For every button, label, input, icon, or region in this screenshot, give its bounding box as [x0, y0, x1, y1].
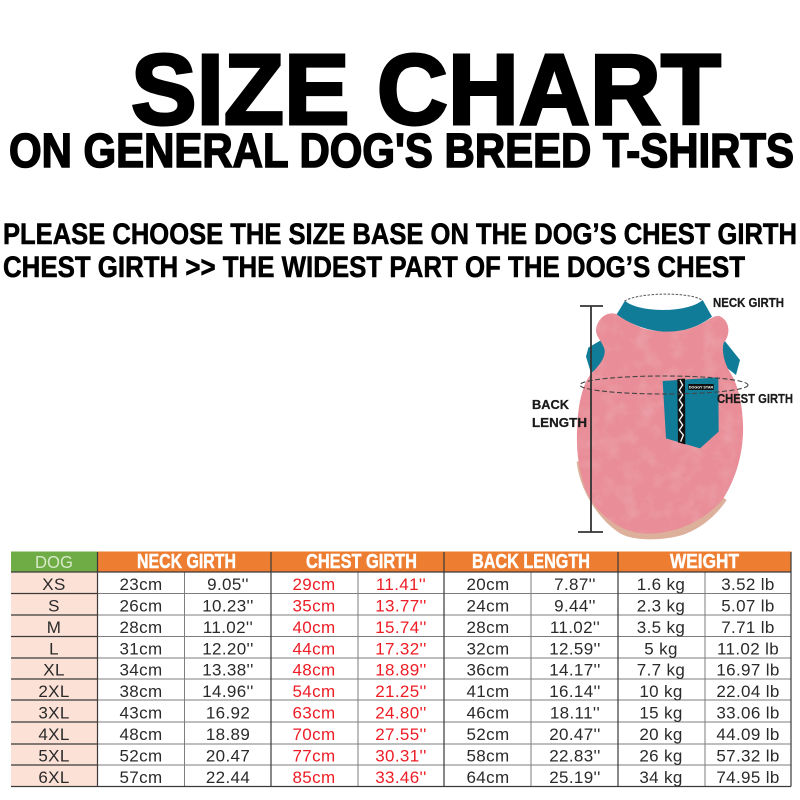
size column background — [11, 572, 98, 786]
label: back length — [532, 397, 587, 430]
back length arrow — [578, 306, 603, 532]
row 2XL: 38cm — [120, 682, 162, 701]
row S: 24cm — [467, 596, 509, 616]
row S: 35cm — [293, 596, 335, 616]
row 6XL — [38, 768, 780, 787]
row L — [49, 640, 779, 658]
label: neck girth: NECK GIRTH — [713, 295, 784, 310]
row XS: 23cm — [120, 575, 162, 594]
row XL: 48cm — [293, 660, 335, 680]
row XL: 18.89'' — [375, 660, 427, 680]
row 3XL: 3XL — [38, 704, 70, 722]
row 5XL: 57.32 lb — [716, 746, 780, 766]
row 4XL: 44.09 lb — [716, 725, 780, 744]
row L: 44cm — [293, 640, 335, 658]
row 5XL: 20.47 — [206, 746, 250, 766]
row XS: 11.41'' — [376, 575, 426, 594]
row 6XL: 33.46'' — [375, 768, 427, 787]
icon: dog fleece vest: DOGGY STAR — [689, 385, 713, 389]
row 5XL: 58cm — [467, 746, 509, 766]
row XS: 7.87'' — [554, 575, 596, 594]
row 5XL: 22.83'' — [549, 746, 601, 766]
row 5XL: 26 kg — [639, 746, 683, 766]
row M: 11.02'' — [550, 618, 600, 637]
row 2XL: 2XL — [38, 682, 70, 701]
row 3XL: 18.11'' — [550, 704, 600, 722]
row L: L — [49, 640, 59, 658]
row XS: 3.52 lb — [721, 575, 775, 594]
row XL: XL — [43, 660, 65, 680]
size table — [11, 551, 792, 787]
diagram: dog shirt with measurements — [532, 294, 793, 539]
row S: 10.23'' — [202, 596, 254, 616]
row 4XL: 18.89 — [206, 725, 250, 744]
row 2XL: 22.04 lb — [716, 682, 780, 701]
row 4XL: 20.47'' — [549, 725, 601, 744]
row 4XL: 27.55'' — [375, 725, 427, 744]
table header — [11, 551, 792, 573]
row S: 2.3 kg — [637, 596, 685, 616]
row M — [47, 618, 775, 637]
row XL: 7.7 kg — [637, 660, 685, 680]
row 4XL: 48cm — [120, 725, 162, 744]
icon: dog fleece vest — [577, 300, 743, 539]
row 5XL: 5XL — [38, 746, 70, 766]
row S: 9.44'' — [554, 596, 596, 616]
row 5XL — [38, 746, 780, 766]
row M: 40cm — [293, 618, 335, 637]
row 5XL: 30.31'' — [375, 746, 427, 766]
table header: NECK GIRTH — [137, 551, 236, 573]
row 2XL: 41cm — [467, 682, 509, 701]
row 3XL: 15 kg — [639, 704, 683, 722]
row M: 11.02'' — [203, 618, 253, 637]
row 6XL: 22.44 — [206, 768, 250, 787]
row 3XL: 46cm — [467, 704, 509, 722]
row 2XL: 10 kg — [639, 682, 683, 701]
row M: M — [47, 618, 61, 637]
row 6XL: 25.19'' — [549, 768, 601, 787]
row L: 32cm — [467, 640, 509, 658]
row 2XL: 21.25'' — [375, 682, 427, 701]
table header: DOG — [35, 552, 73, 572]
row XS: XS — [42, 575, 66, 594]
row 5XL: 52cm — [120, 746, 162, 766]
row 3XL: 33.06 lb — [716, 704, 780, 722]
title: SIZE CHART — [131, 34, 721, 146]
table header: WEIGHT — [670, 551, 739, 573]
row XL — [43, 660, 780, 680]
row S: S — [48, 596, 60, 616]
row XL: 13.38'' — [202, 660, 254, 680]
row XL: 14.17'' — [549, 660, 601, 680]
row 2XL: 16.14'' — [549, 682, 601, 701]
row 6XL: 85cm — [293, 768, 335, 787]
row 3XL: 63cm — [293, 704, 335, 722]
row M: 28cm — [467, 618, 509, 637]
row M: 15.74'' — [375, 618, 427, 637]
row XS: 9.05'' — [207, 575, 249, 594]
row XS: 1.6 kg — [637, 575, 685, 594]
row 2XL — [38, 682, 780, 701]
row L: 12.20'' — [202, 640, 254, 658]
row 3XL: 43cm — [120, 704, 162, 722]
row 6XL: 57cm — [120, 768, 162, 787]
row L: 5 kg — [644, 640, 678, 658]
row S: 26cm — [120, 596, 162, 616]
row 4XL: 4XL — [38, 725, 70, 744]
row 4XL: 52cm — [467, 725, 509, 744]
row 4XL: 20 kg — [639, 725, 683, 744]
row 3XL — [38, 704, 780, 722]
row 6XL: 74.95 lb — [716, 768, 780, 787]
row 6XL: 64cm — [467, 768, 509, 787]
chest girth dashed ellipse — [580, 376, 748, 394]
neck girth dashed ellipse — [624, 294, 702, 301]
row 3XL: 24.80'' — [375, 704, 427, 722]
row M: 3.5 kg — [637, 618, 685, 637]
row 2XL: 54cm — [293, 682, 335, 701]
label: back length: BACK — [532, 397, 570, 412]
row S: 13.77'' — [375, 596, 427, 616]
row XL: 16.97 lb — [716, 660, 780, 680]
row 5XL: 77cm — [293, 746, 335, 766]
row XL: 34cm — [120, 660, 162, 680]
row L: 31cm — [120, 640, 162, 658]
row S — [48, 596, 775, 616]
row L: 17.32'' — [375, 640, 427, 658]
row 4XL: 70cm — [293, 725, 335, 744]
table header: BACK LENGTH — [472, 551, 590, 573]
row XS: 29cm — [293, 575, 335, 594]
table header: CHEST GIRTH — [306, 551, 417, 573]
row XL: 36cm — [467, 660, 509, 680]
row 6XL: 6XL — [38, 768, 70, 787]
row L: 11.02 lb — [717, 640, 779, 658]
row L: 12.59'' — [549, 640, 601, 658]
row M: 28cm — [120, 618, 162, 637]
row S: 5.07 lb — [721, 596, 775, 616]
row 4XL — [38, 725, 780, 744]
row XS: 20cm — [467, 575, 509, 594]
row 3XL: 16.92 — [206, 704, 250, 722]
label: back length: LENGTH — [532, 415, 587, 430]
row 2XL: 14.96'' — [202, 682, 254, 701]
row XS — [42, 575, 775, 594]
row M: 7.71 lb — [721, 618, 775, 637]
row 6XL: 34 kg — [639, 768, 683, 787]
